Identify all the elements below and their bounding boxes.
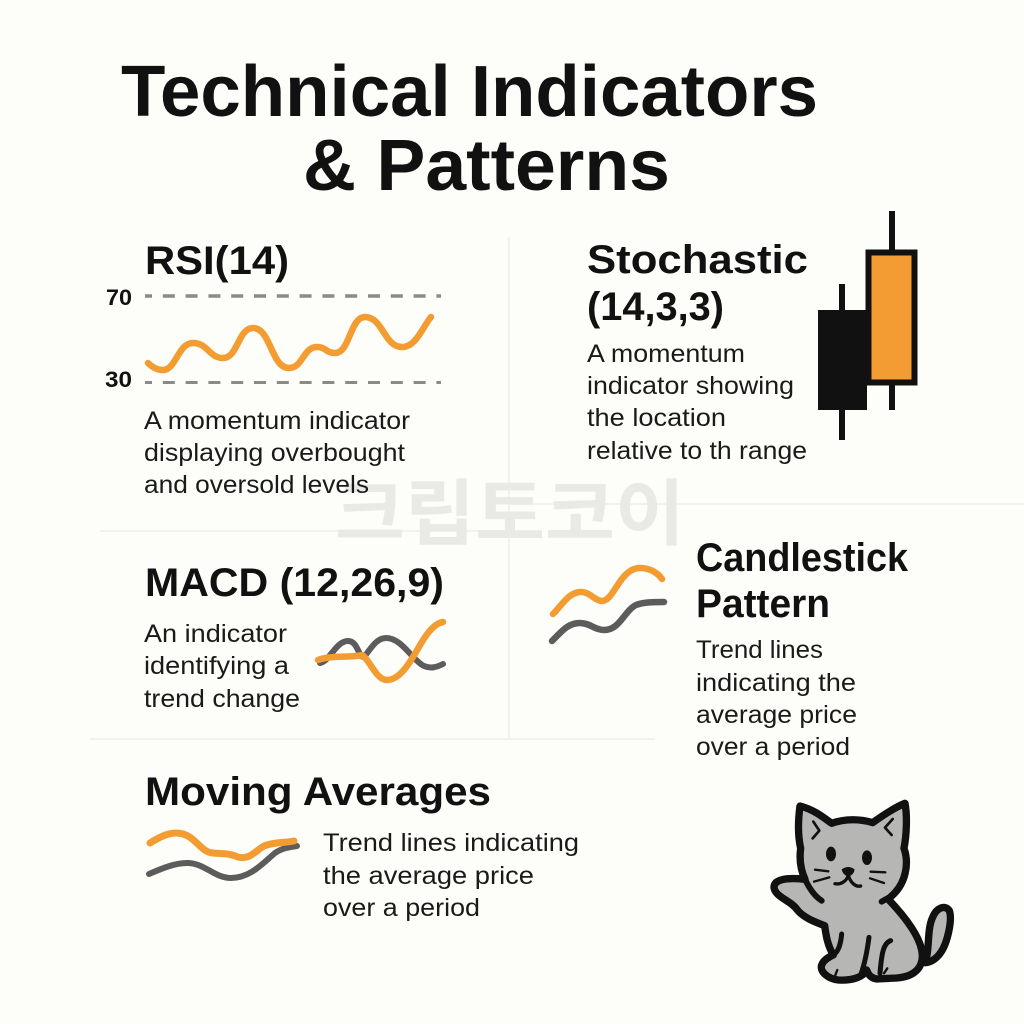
description: Candlestick Pattern: average price [696,701,857,729]
label: 70: 70 [106,285,132,310]
title: & Patterns [303,126,670,206]
threshold line: 70 [145,294,441,298]
description: Moving Averages: Trend lines indicating [323,829,579,857]
cat whiskers [814,870,885,883]
RSI line chart [148,317,431,370]
description: Moving Averages [323,829,579,922]
description: RSI [144,407,410,499]
cat arm crease [805,879,822,901]
heading: Stochastic (14,3,3): (14,3,3) [587,285,724,329]
icon: waving grey cat [774,803,950,980]
description: RSI: A momentum indicator [144,407,410,435]
heading: Stochastic (14,3,3) [587,238,808,329]
icon: MACD crossover lines [318,622,443,680]
description: Stochastic: relative to th range [587,437,807,465]
heading: Moving Averages: Moving Averages [145,770,491,814]
title [121,52,818,206]
icon: trend lines [552,568,664,641]
cat right eye [862,850,872,865]
heading: Candlestick Pattern: Pattern [696,582,830,626]
description: Candlestick Pattern [696,636,857,761]
description: Stochastic [587,340,807,465]
description: Candlestick Pattern: indicating the [696,669,856,697]
description: Stochastic: the location [587,404,726,432]
icon: moving average lines [149,833,297,878]
heading: Stochastic (14,3,3): Stochastic [587,238,808,282]
title: Technical Indicators [121,52,818,132]
description: RSI: and oversold levels [144,471,369,499]
description: Stochastic: A momentum [587,340,745,368]
description: Moving Averages: over a period [323,894,480,922]
panel: RSI [105,239,441,499]
description: MACD: An indicator [144,620,287,648]
heading: Candlestick Pattern [696,536,909,626]
description: Candlestick Pattern: over a period [696,733,850,761]
cat nose [842,867,855,877]
description: Candlestick Pattern: Trend lines [696,636,823,664]
cat tail [925,907,950,963]
description: MACD: identifying a [144,652,289,680]
heading: MACD: MACD (12,26,9) [145,561,444,605]
heading: Candlestick Pattern: Candlestick [696,536,909,580]
watermark: 크립토코이 [335,455,685,560]
cat chin crease [882,896,892,902]
cat front leg lines [833,934,891,975]
panel: Candlestick Pattern [552,536,909,761]
panel: Stochastic [587,211,914,465]
description: Moving Averages: the average price [323,862,534,890]
cat left ear inner [813,822,819,838]
threshold line: 30 [145,381,441,384]
cat right ear inner [885,819,893,835]
cat body fill and outline [774,803,922,980]
panel: Moving Averages [145,770,579,922]
description: MACD [144,620,300,713]
description: Stochastic: indicator showing [587,372,794,400]
description: RSI: displaying overbought [144,439,405,467]
heading: RSI(14): RSI(14) [145,239,289,283]
label: 30: 30 [105,367,132,392]
icon: candlesticks [818,211,914,440]
cat toes [835,968,887,976]
panel: MACD [144,561,444,713]
cat left eye [826,847,836,861]
description: MACD: trend change [144,685,300,713]
cat mouth [835,875,861,886]
